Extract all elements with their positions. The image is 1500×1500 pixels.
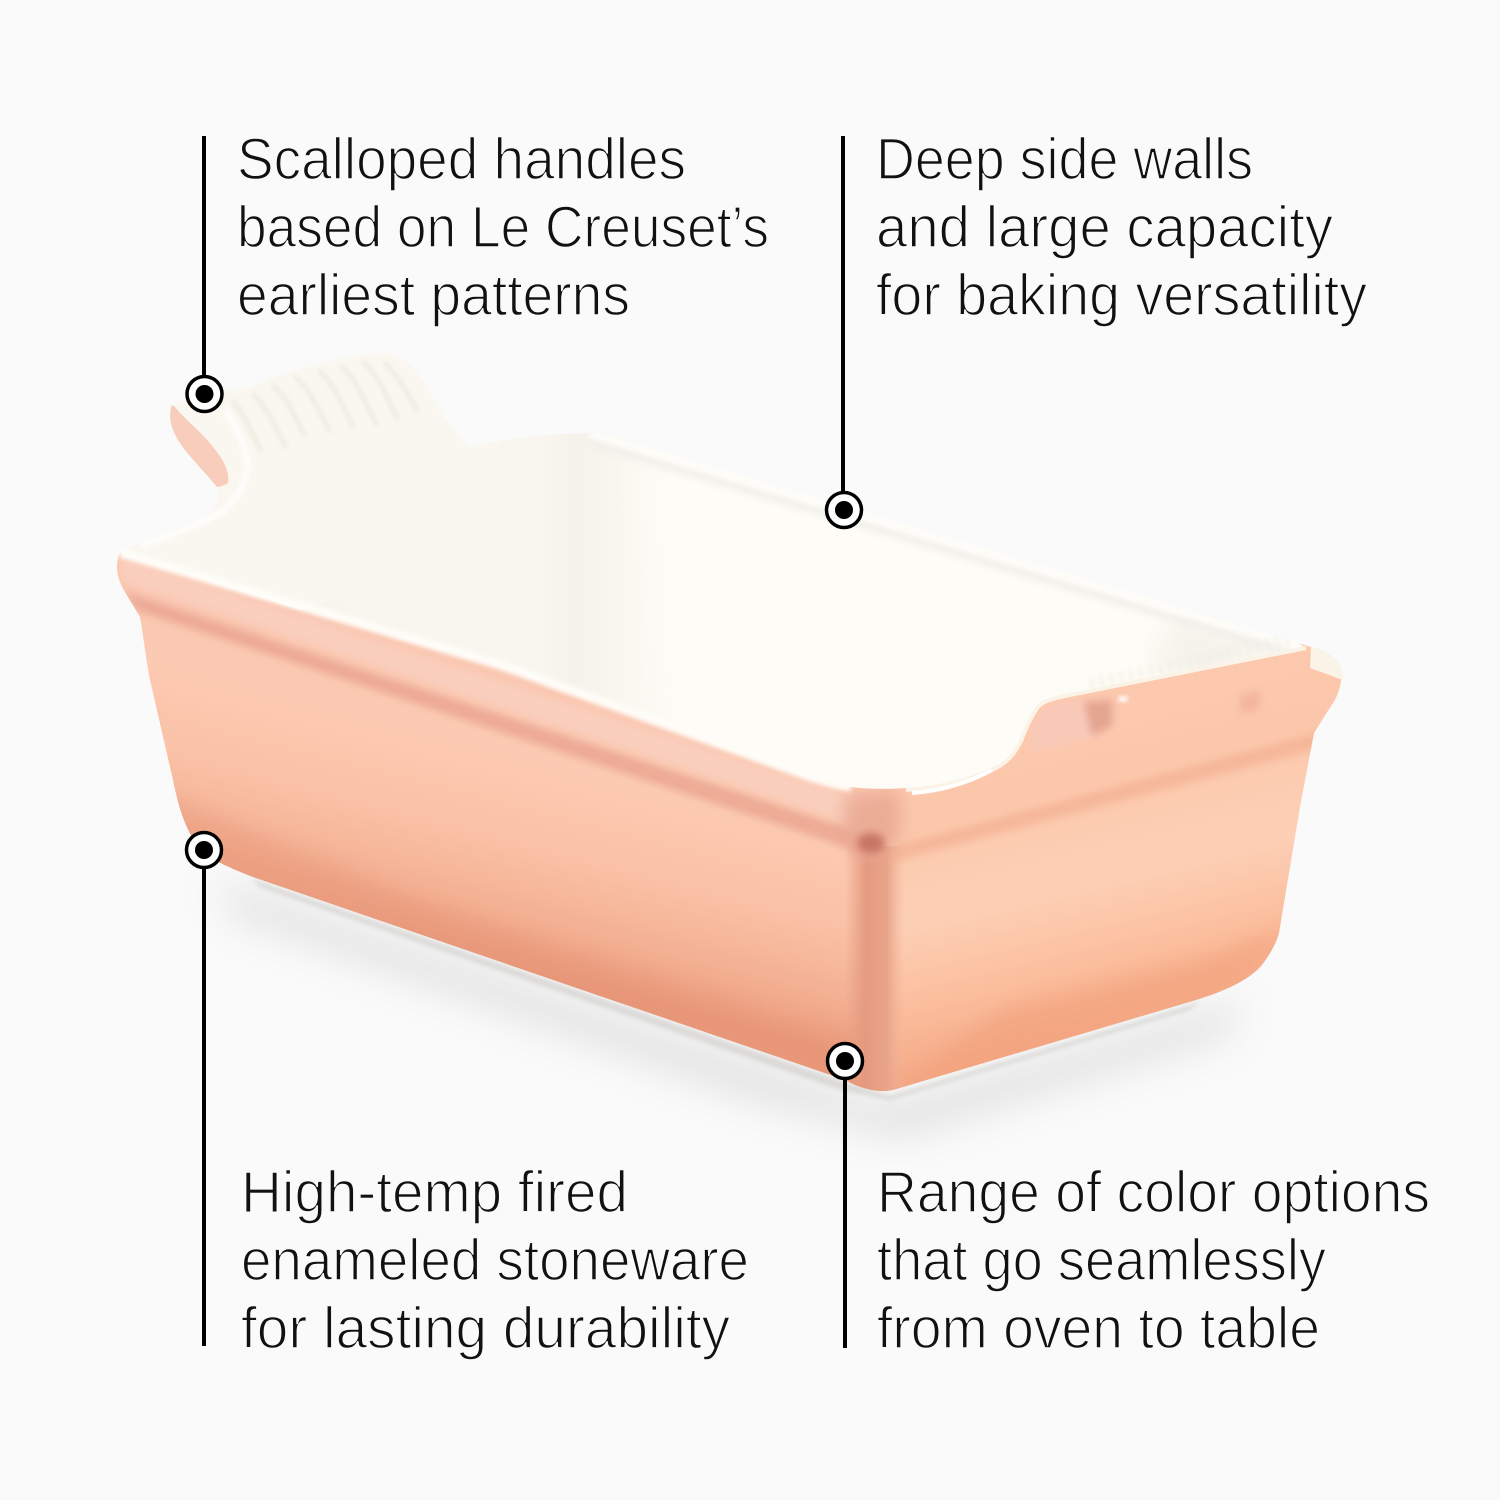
pan interior: [312, 433, 1304, 789]
text block: [241, 1160, 749, 1361]
callout: stoneware: [186, 832, 749, 1361]
pan drop shadow: [215, 878, 1245, 1135]
marker: [186, 832, 222, 868]
handle ribs: [232, 361, 418, 452]
text block: Deep side walls: [876, 127, 1253, 192]
right handle: [906, 647, 1343, 793]
text block: that go seamlessly: [877, 1228, 1326, 1293]
side wall: [875, 630, 1355, 1110]
text block: based on Le Creuset’s: [237, 195, 769, 260]
text block: High-temp fired: [241, 1160, 628, 1225]
shading details: [118, 556, 1330, 1096]
text block: earliest patterns: [237, 263, 630, 328]
callout: scalloped handles: [187, 127, 769, 412]
pan front rim highlight: [120, 553, 851, 787]
text block: [877, 1160, 1430, 1361]
pan walls: [100, 530, 1355, 1110]
text block: Range of color options: [877, 1160, 1430, 1225]
text block: [237, 127, 769, 328]
text block: and large capacity: [876, 195, 1333, 260]
marker: [826, 492, 862, 528]
leader line: [841, 136, 845, 492]
text block: for lasting durability: [241, 1296, 730, 1361]
callout: color options: [828, 1044, 1430, 1361]
leader line: [202, 136, 206, 376]
marker: [828, 1044, 862, 1078]
callout: deep side walls: [826, 127, 1367, 528]
leader line: [843, 1079, 847, 1348]
marker: [187, 376, 222, 412]
front wall: [100, 530, 885, 1110]
text block: Scalloped handles: [237, 127, 686, 192]
text block: [876, 127, 1367, 328]
LE CREUSET embossing: [1090, 639, 1290, 684]
product: loaf pan: [100, 353, 1355, 1135]
text block: enameled stoneware: [241, 1228, 749, 1293]
text block: for baking versatility: [876, 263, 1367, 328]
leader line: [202, 868, 206, 1346]
scalloped left handle: [120, 353, 500, 610]
text block: from oven to table: [877, 1296, 1320, 1361]
